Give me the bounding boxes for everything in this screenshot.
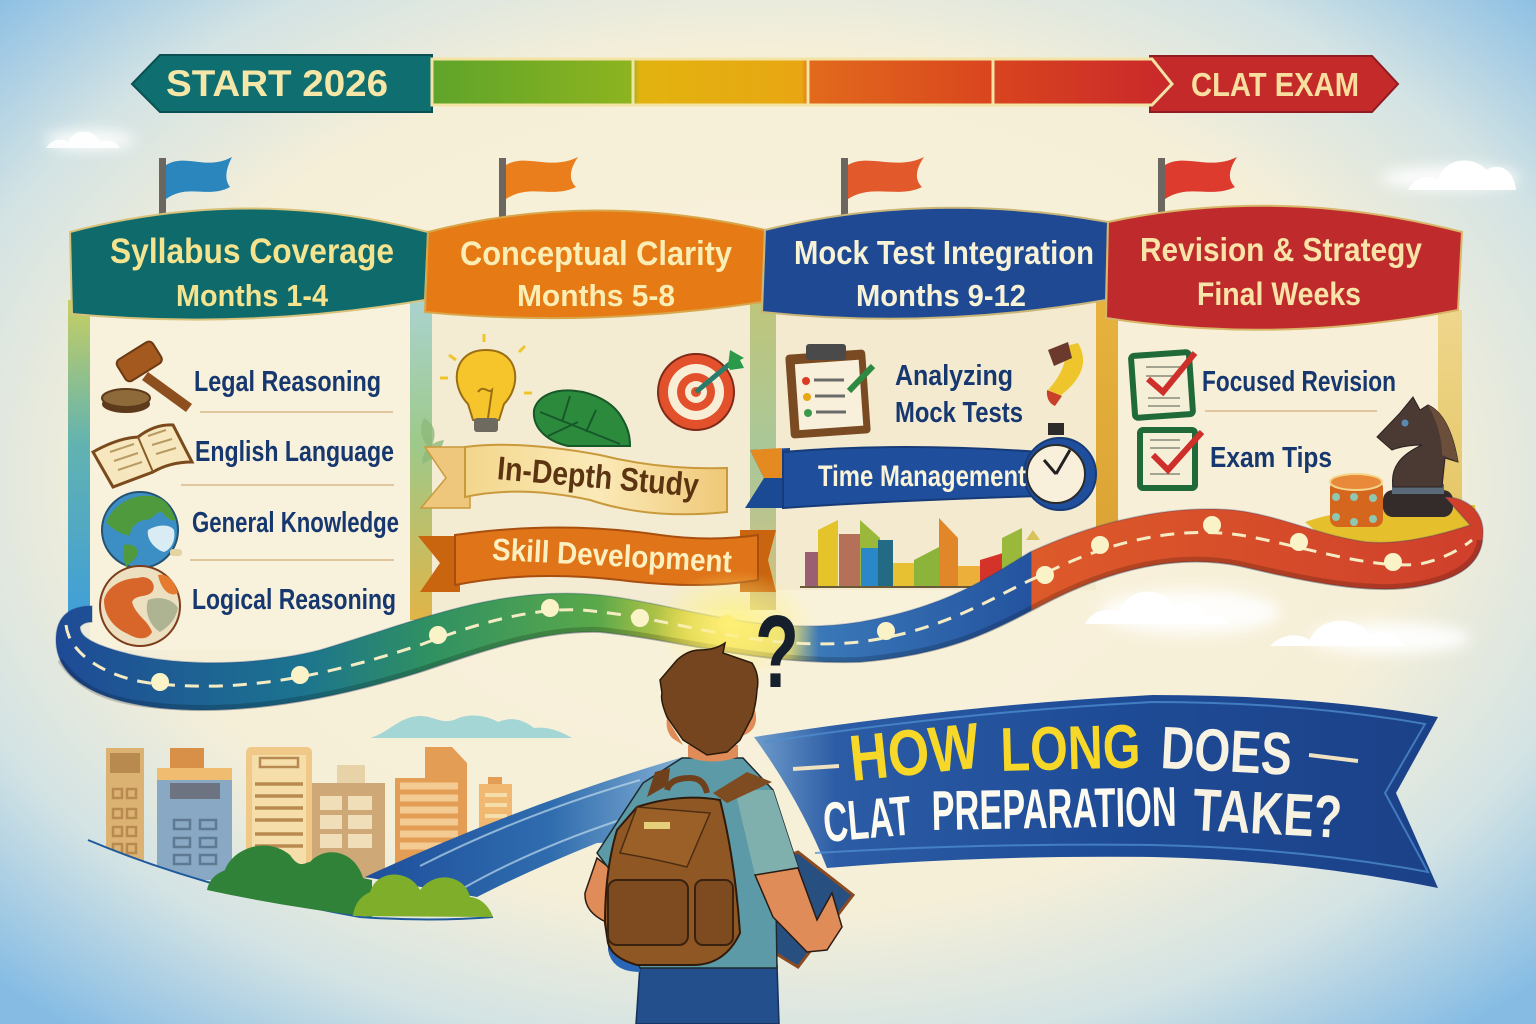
banner: Skill Development [418,528,776,592]
banner: Skill Development: Skill Development [491,532,733,579]
panel: revision and strategy heading: Revision & Strategy [1140,231,1423,268]
panel: syllabus items [93,340,399,646]
icon: globe [102,492,182,568]
icon: pencil [1047,342,1083,406]
progress segments [432,59,1172,105]
icon: red flag [1158,157,1237,222]
panel: syllabus coverage heading: Syllabus Coverage [110,232,394,271]
start arrow: START 2026 [132,55,432,112]
panel: revision and strategy heading: Final Weeks [1197,276,1361,312]
neck and ears [667,710,756,762]
icon: light bulb [440,334,532,432]
icon: red-orange flag [841,157,924,222]
banner: In-Depth Study [421,445,727,514]
icon: checklist one [1131,352,1195,418]
icon: world map globe [100,566,180,646]
left arm [585,858,625,922]
panel: conceptual items [418,334,776,592]
icon: clipboard [785,344,873,439]
panel: mock test integration heading [762,208,1108,319]
hair [660,643,758,755]
panel: revision items [1131,352,1458,527]
text: General Knowledge: General Knowledge [192,507,399,539]
panel: revision and strategy heading [1106,206,1462,330]
start arrow: START 2026: START 2026 [166,63,388,104]
jeans [636,965,779,1024]
icon: blue flag [159,157,232,222]
icon: open book [93,425,192,487]
text: Focused Revision: Focused Revision [1202,366,1396,398]
panel: conceptual clarity heading: Months 5-8 [517,278,675,313]
timeline bar [132,55,1398,112]
question mark: ? [755,594,799,709]
panel: mock test items [745,342,1096,587]
right sleeve [735,790,798,875]
panel: column backgrounds [68,300,1462,650]
text: Analyzing Mock Tests: Analyzing [895,360,1013,392]
text: Analyzing Mock Tests: Mock Tests [895,397,1023,429]
text: Analyzing Mock Tests [895,360,1023,429]
icon: green leaf [534,390,630,446]
end arrow: CLAT EXAM [1150,56,1398,112]
main title banner: DOES [1159,714,1294,788]
icon: target [658,350,744,430]
text: Exam Tips: Exam Tips [1210,442,1332,474]
banner: In-Depth Study: In-Depth Study [496,449,701,504]
swoosh path and bushes [88,757,700,920]
book [775,852,853,967]
glow behind student [655,570,815,680]
main title banner: PREPARATION [931,775,1177,842]
text: Logical Reasoning: Logical Reasoning [192,584,396,616]
icon: chess knight [1377,397,1458,517]
blue item under backpack [608,935,640,972]
panel: syllabus coverage heading [70,208,428,320]
main title banner: LONG [1000,712,1141,785]
shirt [597,758,798,968]
city skyline [106,747,512,880]
student figure [585,594,853,1024]
end arrow: CLAT EXAM: CLAT EXAM [1191,66,1359,103]
icon: gavel [102,340,192,413]
icon: side leaves [421,418,444,464]
backpack [605,768,772,965]
bar chart [800,518,1040,587]
icon: orange flag [499,157,578,222]
panel: conceptual clarity heading [425,210,765,318]
text: Legal Reasoning: Legal Reasoning [194,366,381,398]
panel: mock test integration heading: Months 9-12 [856,278,1026,313]
text: English Language: English Language [195,436,394,468]
flags [159,157,1237,222]
banner: Time Management [745,447,1040,508]
panel: syllabus coverage heading: Months 1-4 [176,278,329,313]
panel: mock test integration heading: Mock Test Integration [794,234,1094,271]
icon: stopwatch [1024,423,1096,510]
right arm and hand [755,868,842,952]
milestone dots [151,516,1402,691]
main title banner: TAKE? [1191,776,1344,851]
main title banner [754,695,1438,888]
main title banner: CLAT [821,784,914,854]
text: Time Management: Time Management [818,460,1026,493]
road with milestones [56,497,1483,710]
icon: coin stack [1330,474,1383,527]
yellow platform [1305,505,1478,560]
panel: conceptual clarity heading: Conceptual Clarity [460,235,732,273]
icon: checklist two [1140,430,1202,488]
main title banner: HOW [846,709,983,795]
